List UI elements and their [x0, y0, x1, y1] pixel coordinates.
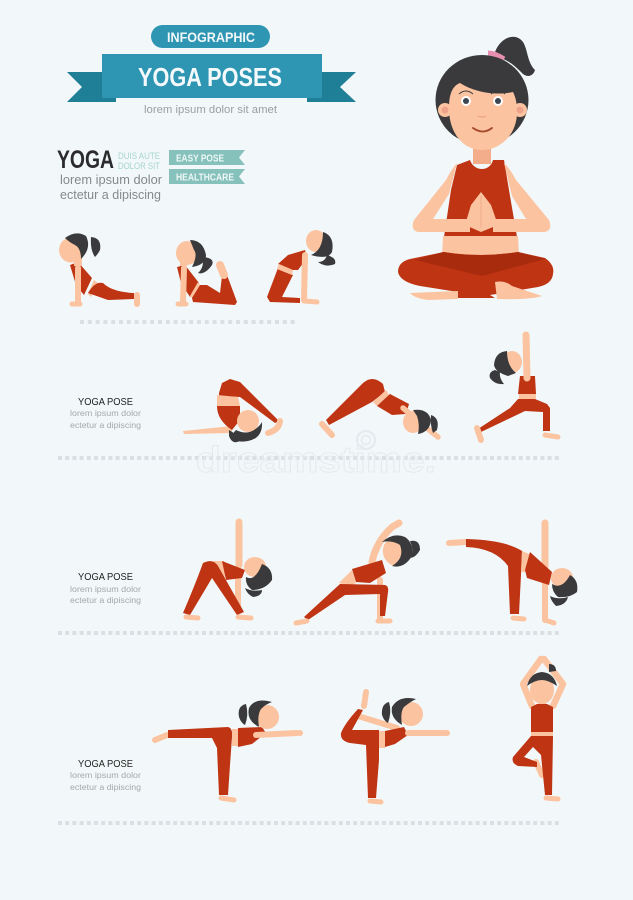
infographic pill: INFOGRAPHIC — [167, 29, 255, 45]
row label 2: YOGA POSE — [78, 571, 133, 583]
yoga text block: YOGA — [57, 146, 114, 174]
pose: cobra — [59, 233, 137, 304]
pose: downward dog — [322, 379, 438, 437]
row label 1 — [70, 396, 141, 430]
pose: crescent lunge — [477, 335, 558, 440]
row label 3 — [70, 758, 141, 792]
title ribbon — [67, 54, 356, 102]
pose: extended side angle — [296, 523, 420, 623]
pose: plow — [183, 379, 280, 442]
row label 3: lorem ipsum dolor — [70, 770, 141, 780]
dotted divider — [58, 456, 560, 460]
pose: warrior three — [155, 700, 303, 800]
dotted divider — [58, 631, 560, 635]
row label 2 — [70, 571, 141, 605]
pose: tree — [513, 659, 563, 799]
row label 1: ectetur a dipiscing — [70, 420, 141, 430]
row label 1: lorem ipsum dolor — [70, 408, 141, 418]
row label 2: ectetur a dipiscing — [70, 595, 141, 605]
row label 3: YOGA POSE — [78, 758, 133, 770]
pose: half moon — [449, 523, 577, 623]
yoga text block: lorem ipsum dolor — [60, 172, 163, 187]
row label 1: YOGA POSE — [78, 396, 133, 408]
pose: camel — [267, 230, 335, 303]
dotted divider — [58, 821, 560, 825]
tag: easy pose: EASY POSE — [176, 152, 224, 164]
yoga text block: DOLOR SIT — [118, 161, 160, 171]
yoga text block — [57, 146, 163, 202]
dotted divider — [80, 320, 298, 324]
tag: easy pose — [169, 150, 245, 165]
tag: healthcare: HEALTHCARE — [176, 172, 234, 184]
title ribbon: YOGA POSES — [138, 62, 282, 92]
pose: bow cobra — [176, 240, 237, 305]
pose: triangle — [183, 522, 272, 618]
pose: dancer — [341, 692, 447, 802]
watermark: dreamstime. — [196, 439, 436, 480]
row label 3: ectetur a dipiscing — [70, 782, 141, 792]
row label 2: lorem ipsum dolor — [70, 584, 141, 594]
infographic pill — [151, 25, 270, 48]
yoga text block: DUIS AUTE — [118, 151, 160, 161]
yoga text block: ectetur a dipiscing — [60, 187, 161, 202]
subtitle: lorem ipsum dolor sit amet — [144, 104, 277, 116]
main figure: seated lotus pose — [398, 37, 553, 300]
